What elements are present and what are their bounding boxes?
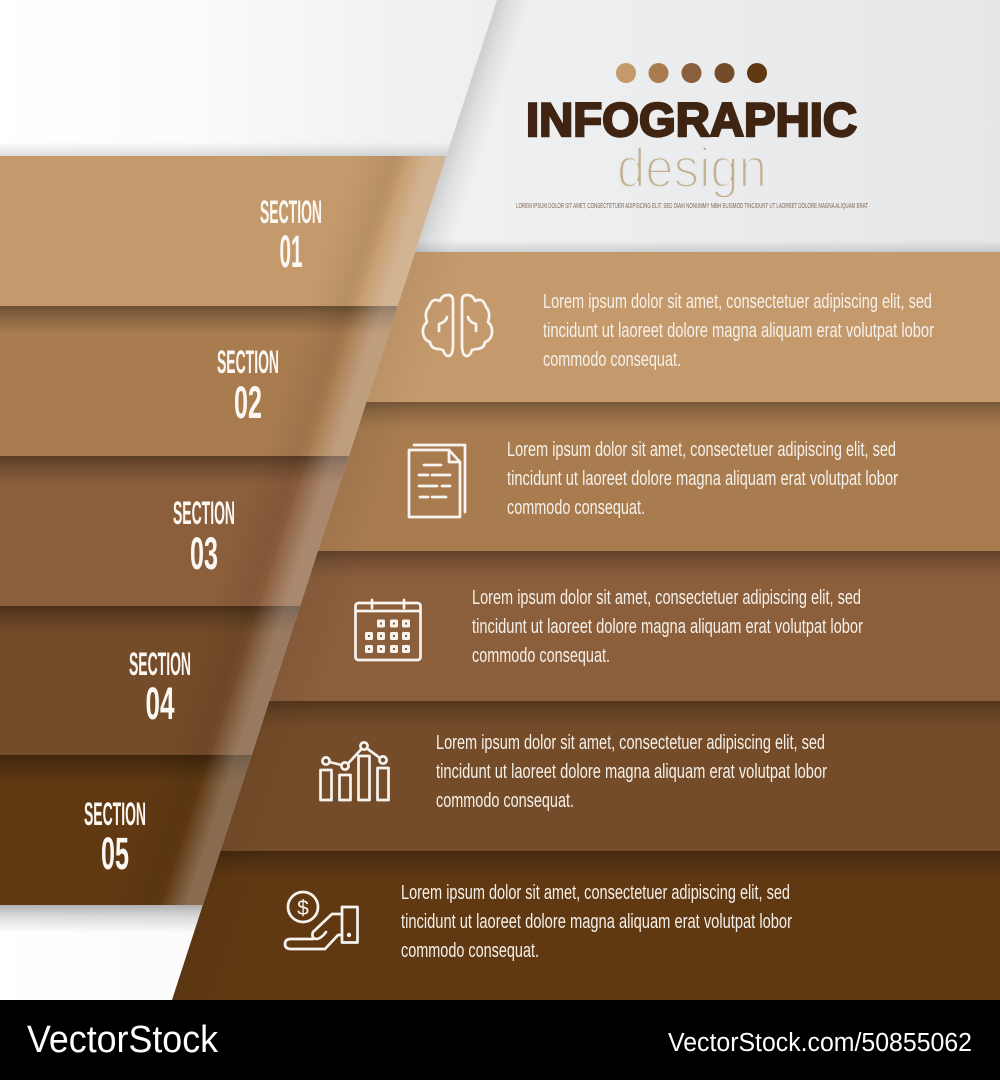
text: row 1: commodo consequat. [543,349,681,371]
text: row 1 [543,291,934,371]
label: section 03: 03 [190,528,218,579]
panel: right band 3 [269,551,1000,701]
panel: right band 2 [318,402,1000,551]
text: row 4: Lorem ipsum dolor sit amet, consectetuer adipiscing elit, sed [436,732,825,754]
panel: section 02: SECTION [217,344,279,380]
text: row 5: commodo consequat. [401,940,539,962]
label: section 04: 04 [146,678,174,729]
text: row 3: tincidunt ut laoreet dolore magna aliquam erat volutpat lobor [472,616,863,638]
icon: document [409,445,465,517]
text: row 4 [436,732,827,812]
panel: section 05: SECTION [84,796,146,832]
panel: section 04: SECTION [129,646,191,682]
label: section 04 [129,646,191,729]
text: row 4: tincidunt ut laoreet dolore magna aliquam erat volutpat lobor [436,761,827,783]
panel: section 04 [0,606,300,755]
text: row 3 [472,587,863,667]
panel: section 01: SECTION [260,194,322,230]
icon: brain [423,295,492,356]
footer image id: VectorStock.com/50855062 [668,1029,972,1057]
panel: right band 4 [220,701,1000,851]
panel: right band 1 [366,252,1000,402]
text: row 3: Lorem ipsum dolor sit amet, consectetuer adipiscing elit, sed [472,587,861,609]
panel: section 03: SECTION [173,495,235,531]
footer logo: VectorStock [27,1019,219,1061]
label: section 02: 02 [234,377,262,428]
label: section 05: 05 [101,828,129,879]
text: row 2 [507,439,898,519]
text: row 3: commodo consequat. [472,645,610,667]
panel: right band 5 [172,851,1000,1000]
footer bar [0,1000,1000,1080]
text: row 2: commodo consequat. [507,497,645,519]
text: row 5: Lorem ipsum dolor sit amet, consectetuer adipiscing elit, sed [401,882,790,904]
icon: bar chart [320,742,388,800]
panel: section 01 [0,156,446,306]
icon: calendar [356,600,420,660]
label: section 03 [173,495,235,579]
icon: hand with coin [285,892,358,949]
text: row 4: commodo consequat. [436,790,574,812]
icon: hand with coin: $ [297,897,309,920]
title: INFOGRAPHIC [526,93,857,146]
label: section 05 [84,796,146,879]
subtitle: design: design [617,136,767,199]
text: row 5: tincidunt ut laoreet dolore magna aliquam erat volutpat lobor [401,911,792,933]
label: section 01 [260,194,322,277]
text: row 5 [401,882,792,962]
panel: section 02 [0,306,398,456]
label: section 02 [217,344,279,428]
panel: section 03 [0,456,349,606]
colour dots [616,63,767,83]
label: section 01: 01 [280,226,302,277]
panel: section 05 [0,755,252,905]
